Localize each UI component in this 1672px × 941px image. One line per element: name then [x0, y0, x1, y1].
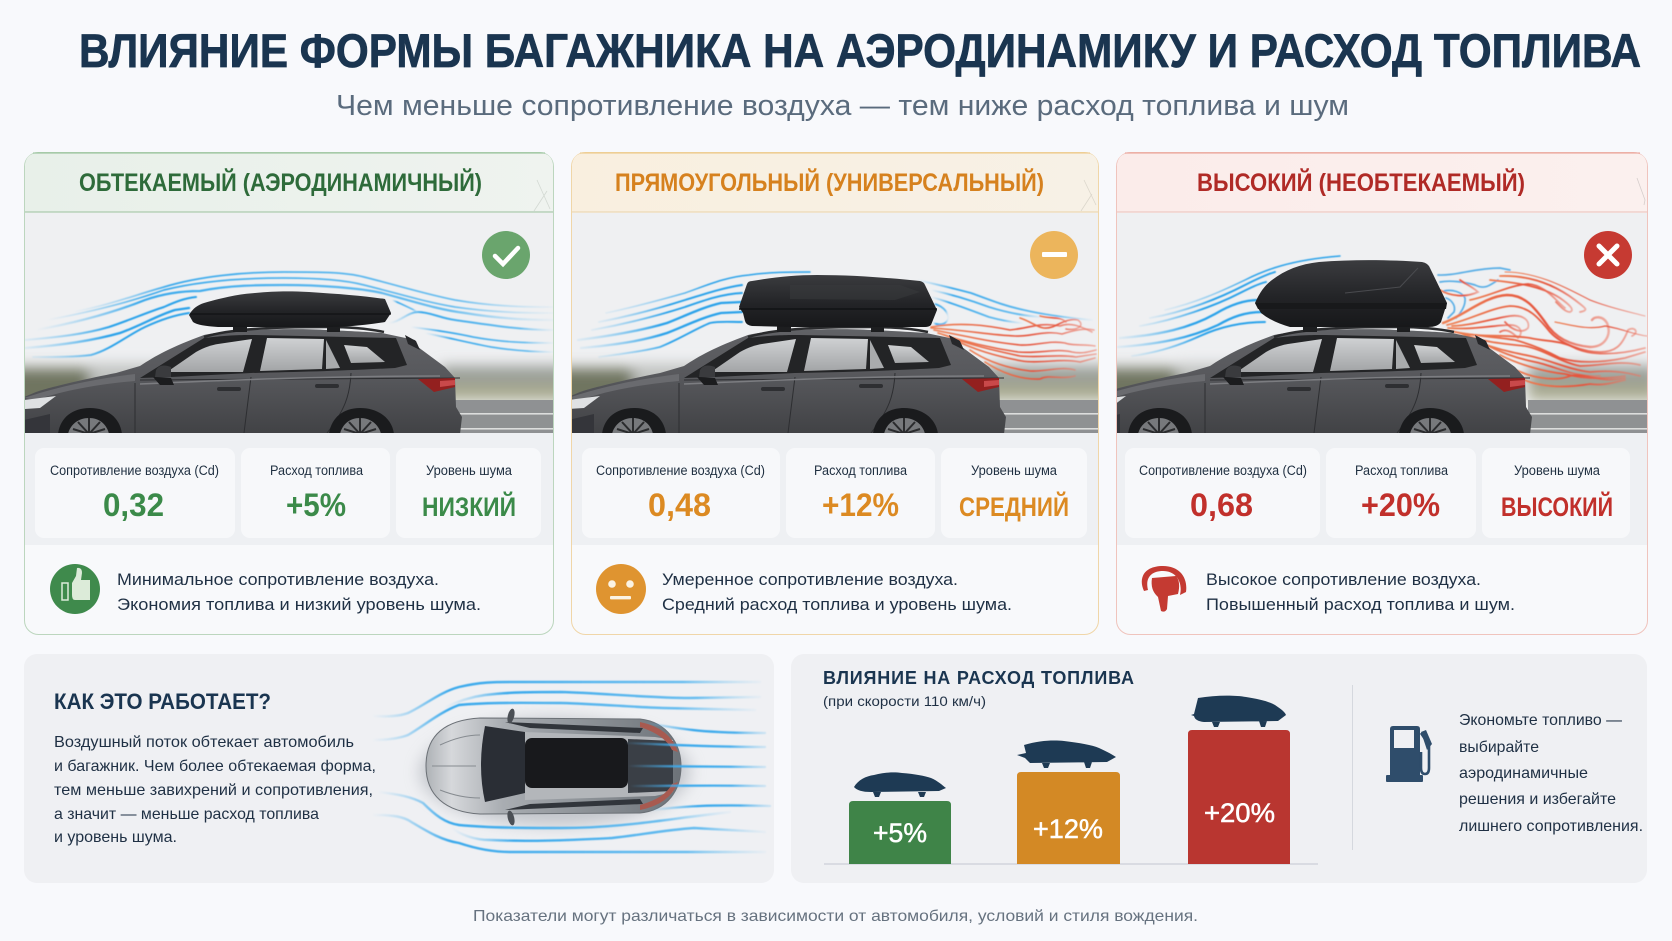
footnote: Показатели могут различаться в зависимости от автомобиля, условий и стиля вождения. [473, 908, 1198, 925]
roof box: tall [1255, 260, 1447, 327]
car body top view [426, 708, 681, 826]
status badge: check [482, 231, 530, 279]
summary text: rectangular: Средний расход топлива и уровень шума. [662, 595, 1012, 614]
tip text: выбирайте [1459, 739, 1539, 756]
tip text: аэродинамичные [1459, 765, 1588, 782]
panel header: streamlined: ОБТЕКАЕМЫЙ (АЭРОДИНАМИЧНЫЙ) [79, 167, 482, 197]
tip text: Экономьте топливо — [1459, 712, 1622, 729]
illustration: top view of car with airflow [372, 682, 770, 852]
summary text: rectangular [662, 570, 1012, 614]
panel: how it works [24, 654, 774, 883]
explanation text: и багажник. Чем более обтекаемая форма, [54, 758, 376, 775]
status badge: cross [1584, 231, 1632, 279]
panel: tall roof box [1116, 152, 1648, 635]
panel header: tall [1117, 153, 1647, 212]
illustration: car with tall box, strong turbulence [1117, 213, 1647, 433]
stat: fuel use: +20% [1361, 487, 1440, 523]
explanation text: Воздушный поток обтекает автомобиль [54, 734, 354, 751]
stat: drag coefficient [582, 448, 780, 538]
bar: +20% [1188, 696, 1290, 864]
summary text: tall: Повышенный расход топлива и шум. [1206, 595, 1515, 614]
stat: noise level: Уровень шума [971, 463, 1057, 478]
stat: drag coefficient: Сопротивление воздуха (Cd) [50, 463, 219, 478]
panel header: rectangular [572, 153, 1098, 212]
summary text: tall [1206, 570, 1515, 614]
stat: drag coefficient [35, 448, 235, 538]
icon: thumbs down [1142, 566, 1186, 612]
stat: noise level [941, 448, 1087, 538]
roof box: rectangular [739, 275, 937, 327]
explanation text [54, 734, 376, 846]
icon: fuel pump [1386, 726, 1432, 782]
tip text: лишнего сопротивления. [1459, 818, 1643, 835]
stat: fuel use [241, 448, 390, 538]
subheading: speed: (при скорости 110 км/ч) [823, 693, 986, 709]
stat: drag coefficient: 0,48 [648, 487, 711, 523]
stat: drag coefficient: 0,32 [103, 487, 164, 523]
summary text: rectangular: Умеренное сопротивление воздуха. [662, 570, 958, 589]
stat: fuel use: Расход топлива [270, 463, 363, 478]
stats band: rectangular [572, 433, 1098, 545]
bar chart [824, 696, 1318, 865]
stat: noise level: СРЕДНИЙ [959, 491, 1069, 522]
stat: noise level: Уровень шума [426, 463, 512, 478]
explanation text: и уровень шума. [54, 829, 177, 846]
panel header: streamlined [25, 153, 553, 212]
summary text: streamlined: Экономия топлива и низкий уровень шума. [117, 595, 481, 614]
stat: drag coefficient: 0,68 [1190, 487, 1253, 523]
bar: +5%: +5% [873, 818, 927, 848]
panel header: tall: ВЫСОКИЙ (НЕОБТЕКАЕМЫЙ) [1197, 167, 1525, 197]
panel: streamlined roof box [0, 152, 570, 634]
stat: noise level [1482, 448, 1630, 538]
bar: +12%: +12% [1033, 814, 1103, 844]
stat: noise level [396, 448, 541, 538]
tip text: решения и избегайте [1459, 791, 1616, 808]
stat: fuel use [1326, 448, 1476, 538]
airflow lines around car [372, 682, 765, 852]
stats band: streamlined [25, 433, 553, 545]
stat: fuel use: +5% [286, 487, 346, 523]
stat: fuel use: Расход топлива [1355, 463, 1448, 478]
panel header: rectangular: ПРЯМОУГОЛЬНЫЙ (УНИВЕРСАЛЬНЫЙ) [615, 167, 1044, 197]
roof box: streamlined [189, 291, 391, 327]
explanation text: а значит — меньше расход топлива [54, 806, 319, 823]
heading: fuel impact: ВЛИЯНИЕ НА РАСХОД ТОПЛИВА [823, 668, 1134, 688]
bar: +5% [849, 772, 951, 864]
panel: fuel impact chart [791, 654, 1647, 883]
stats band: tall [1117, 433, 1647, 545]
stat: drag coefficient [1125, 448, 1320, 538]
illustration: car with streamlined box and smooth airflow [0, 213, 570, 434]
icon: neutral face [596, 564, 646, 614]
bar: +12% [1017, 740, 1120, 864]
stat: fuel use: +12% [822, 487, 899, 523]
stat: noise level: Уровень шума [1514, 463, 1600, 478]
stat: fuel use [786, 448, 935, 538]
summary text: streamlined: Минимальное сопротивление воздуха. [117, 570, 439, 589]
stat: drag coefficient: Сопротивление воздуха (Cd) [1139, 463, 1307, 478]
icon: thumbs up [50, 564, 100, 614]
explanation text: тем меньше завихрений и сопротивления, [54, 782, 373, 799]
bar: +20%: +20% [1204, 798, 1275, 828]
stat: drag coefficient: Сопротивление воздуха (Cd) [596, 463, 765, 478]
summary text: tall: Высокое сопротивление воздуха. [1206, 570, 1481, 589]
heading: how it works: КАК ЭТО РАБОТАЕТ? [54, 689, 271, 714]
tip text [1459, 712, 1643, 835]
illustration: car with rectangular box, mild turbulence [534, 213, 1114, 434]
stat: noise level: ВЫСОКИЙ [1501, 491, 1613, 522]
panel: rectangular roof box [534, 152, 1114, 634]
subtitle: Чем меньше сопротивление воздуха — тем ниже расход топлива и шум [336, 90, 1349, 122]
stat: fuel use: Расход топлива [814, 463, 907, 478]
airflow over rear of car [625, 723, 770, 810]
summary text: streamlined [117, 570, 481, 614]
status badge: minus [1030, 231, 1078, 279]
stat: noise level: НИЗКИЙ [422, 491, 516, 522]
